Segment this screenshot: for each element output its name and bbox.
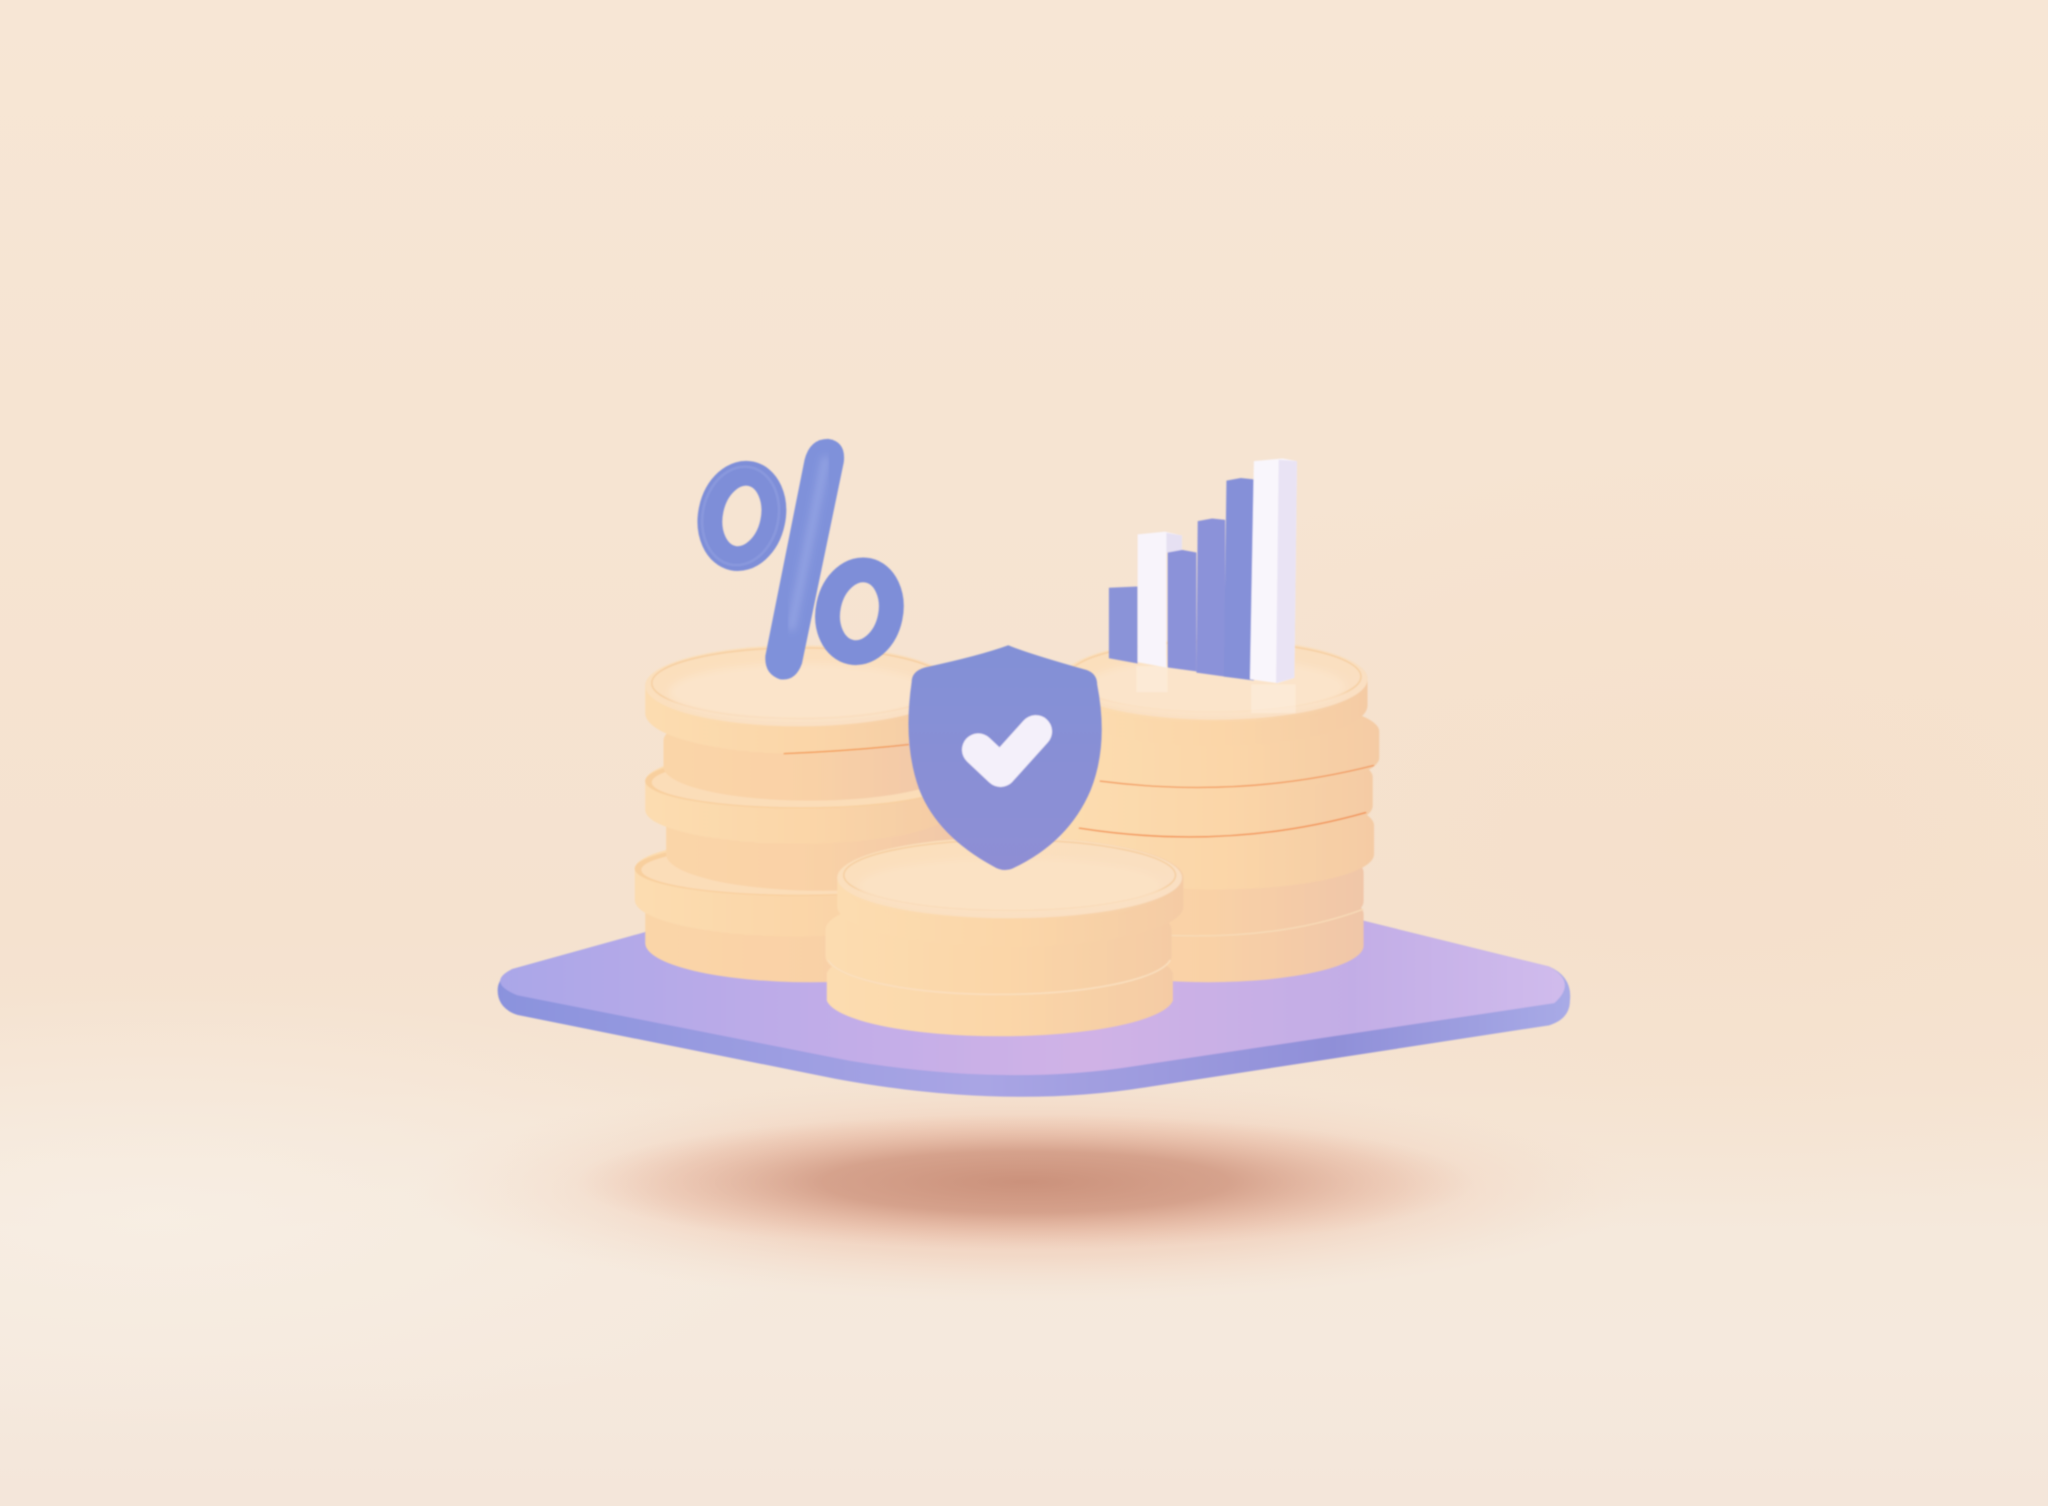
- top coin: [837, 837, 1183, 947]
- shield body: [908, 645, 1102, 870]
- percent sign: [693, 439, 899, 680]
- bar reflections: [1136, 666, 1296, 713]
- coin: [664, 707, 956, 801]
- coin: [635, 837, 959, 936]
- blue bar 3: [1196, 519, 1225, 677]
- percent bottom ring: [820, 564, 899, 659]
- white bar 2: [1250, 458, 1297, 683]
- coin: [825, 891, 1172, 995]
- coin: [645, 750, 953, 844]
- coin: [1061, 790, 1374, 889]
- coin: [1066, 697, 1379, 792]
- left coin stack: [635, 645, 980, 982]
- shield: [908, 645, 1102, 870]
- blue bar 4: [1224, 478, 1254, 681]
- platform: [498, 920, 1570, 1097]
- coin: [1064, 743, 1373, 840]
- blue bar 2: [1168, 550, 1196, 671]
- front coin stack: [825, 837, 1183, 1036]
- white bar 1: [1138, 532, 1182, 667]
- floating shadow: [418, 1074, 1646, 1304]
- coin: [645, 875, 974, 982]
- right coin stack: [1053, 639, 1379, 982]
- coin: [827, 937, 1173, 1036]
- percent top ring: [693, 460, 788, 572]
- coin: [1053, 836, 1364, 938]
- top coin: [645, 645, 953, 754]
- coin: [666, 789, 980, 891]
- bar chart: [1109, 458, 1297, 713]
- top coin: [1062, 639, 1368, 746]
- check mark: [978, 731, 1036, 771]
- percent slash: [765, 439, 844, 680]
- blue bar 1: [1109, 586, 1138, 664]
- coin: [1053, 878, 1364, 982]
